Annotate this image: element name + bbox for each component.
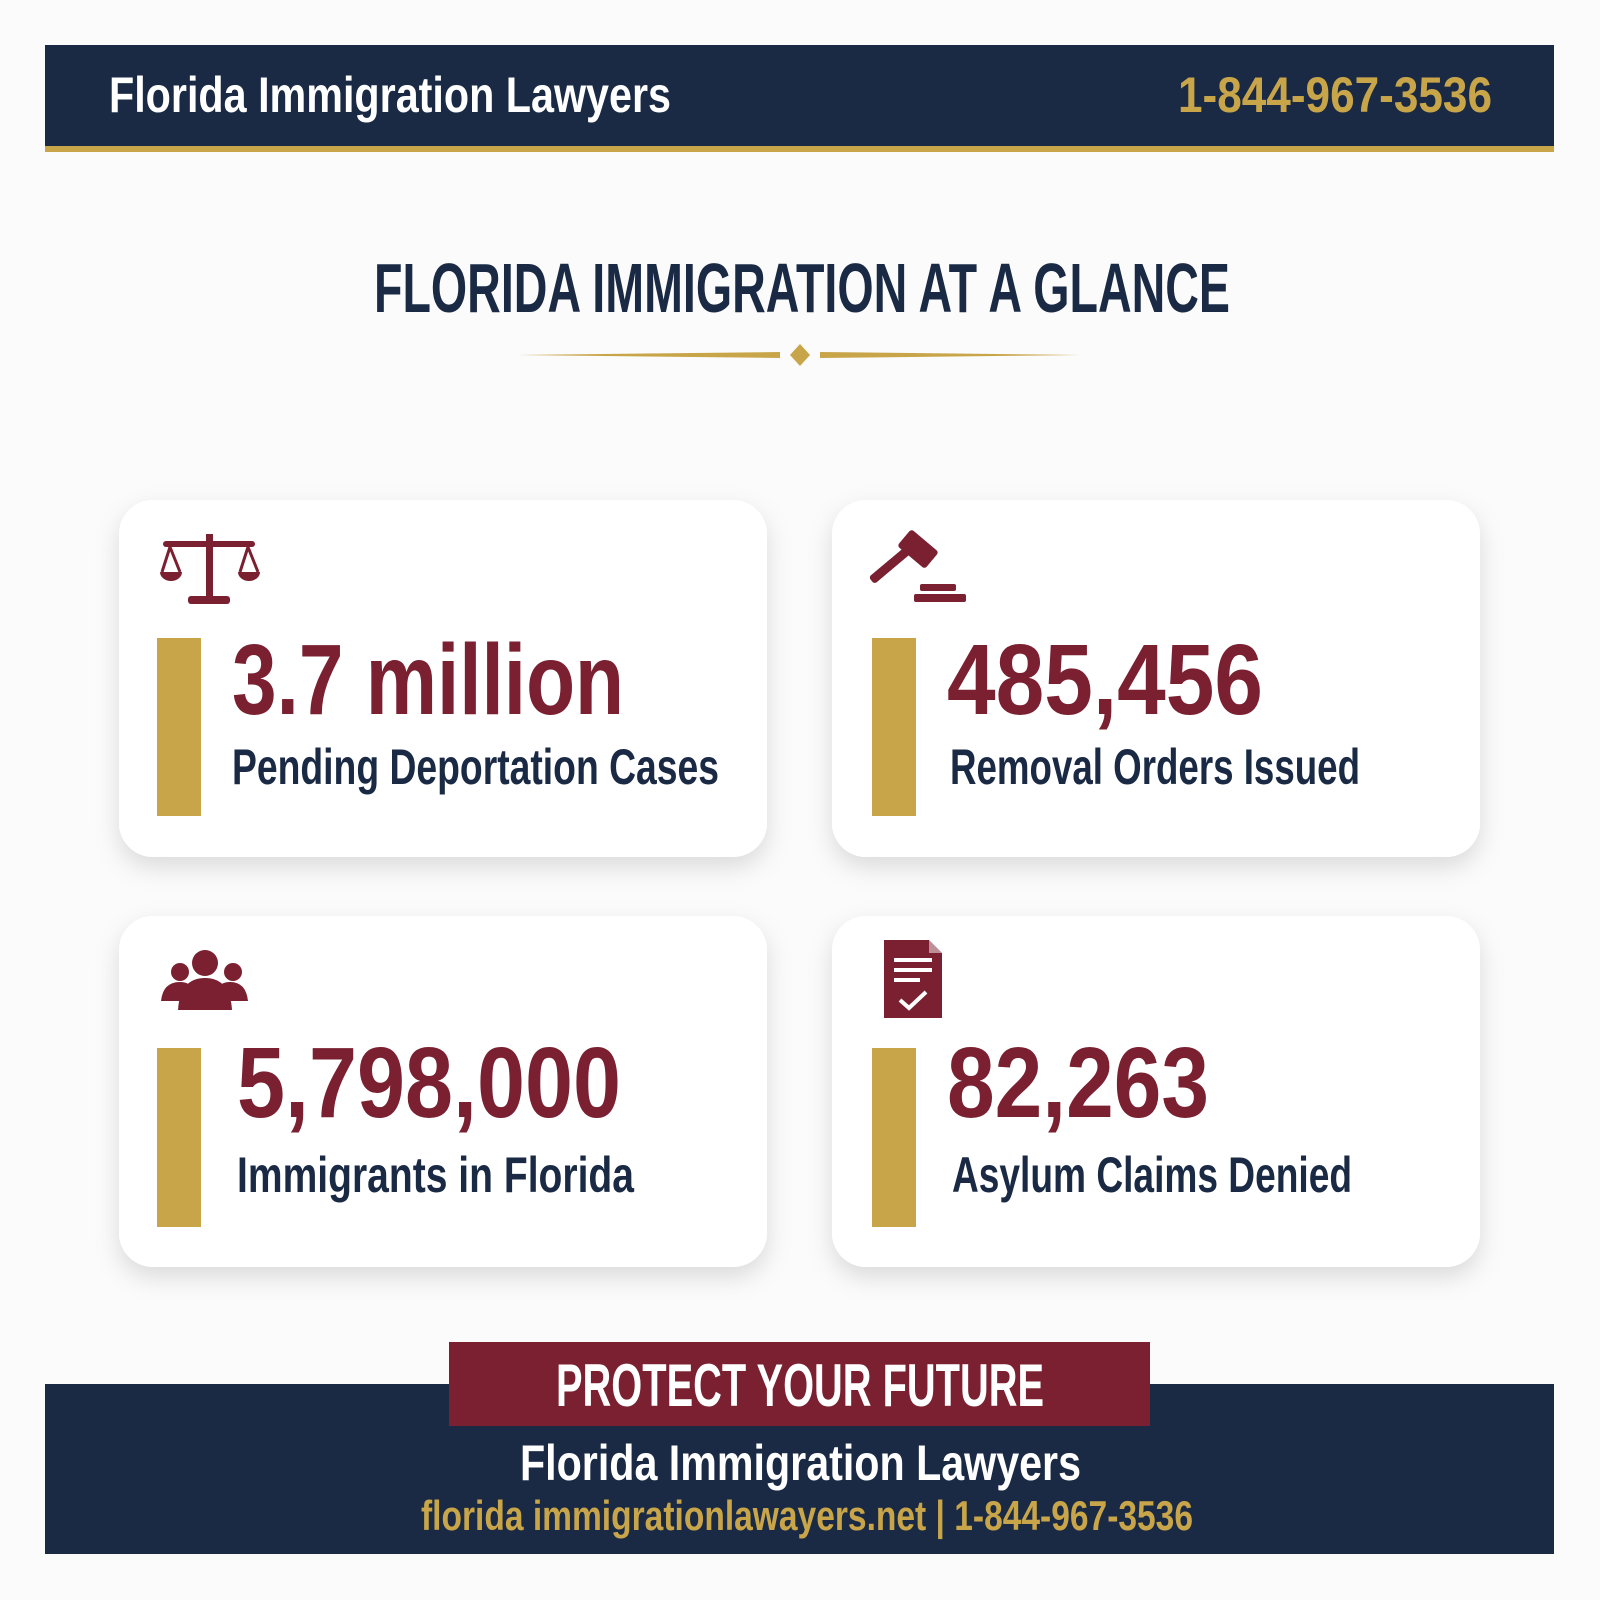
card: immigrants — [119, 916, 767, 1267]
gold bar — [157, 638, 201, 816]
stat number: 485,456 — [947, 624, 1263, 736]
icon: people — [161, 950, 248, 1010]
cta banner — [449, 1342, 1150, 1426]
card: asylum claims — [832, 916, 1480, 1267]
footer name: Florida Immigration Lawyers — [520, 1435, 1081, 1491]
card: removal orders — [832, 500, 1480, 857]
icon: document check — [884, 940, 942, 1018]
gold bar — [872, 1048, 916, 1227]
header bar — [45, 45, 1554, 152]
footer bar — [45, 1384, 1554, 1554]
gold bar — [157, 1048, 201, 1227]
stat label: Pending Deportation Cases — [232, 739, 719, 795]
gold bar — [872, 638, 916, 816]
footer contact: florida immigrationlawayers.net | 1-844-967-3536 — [421, 1492, 1193, 1540]
title divider — [518, 344, 1081, 366]
card: pending deportation — [119, 500, 767, 857]
cta banner: PROTECT YOUR FUTURE — [556, 1352, 1044, 1419]
stat label: Removal Orders Issued — [950, 739, 1360, 795]
stat label: Asylum Claims Denied — [952, 1147, 1352, 1203]
header title: Florida Immigration Lawyers — [109, 67, 671, 123]
stat number: 82,263 — [947, 1027, 1209, 1139]
icon: gavel — [869, 529, 966, 602]
stat label: Immigrants in Florida — [237, 1147, 635, 1203]
stat number: 5,798,000 — [237, 1027, 621, 1139]
icon: scales — [160, 534, 260, 604]
stat number: 3.7 million — [232, 624, 624, 736]
header phone: 1-844-967-3536 — [1178, 67, 1492, 123]
